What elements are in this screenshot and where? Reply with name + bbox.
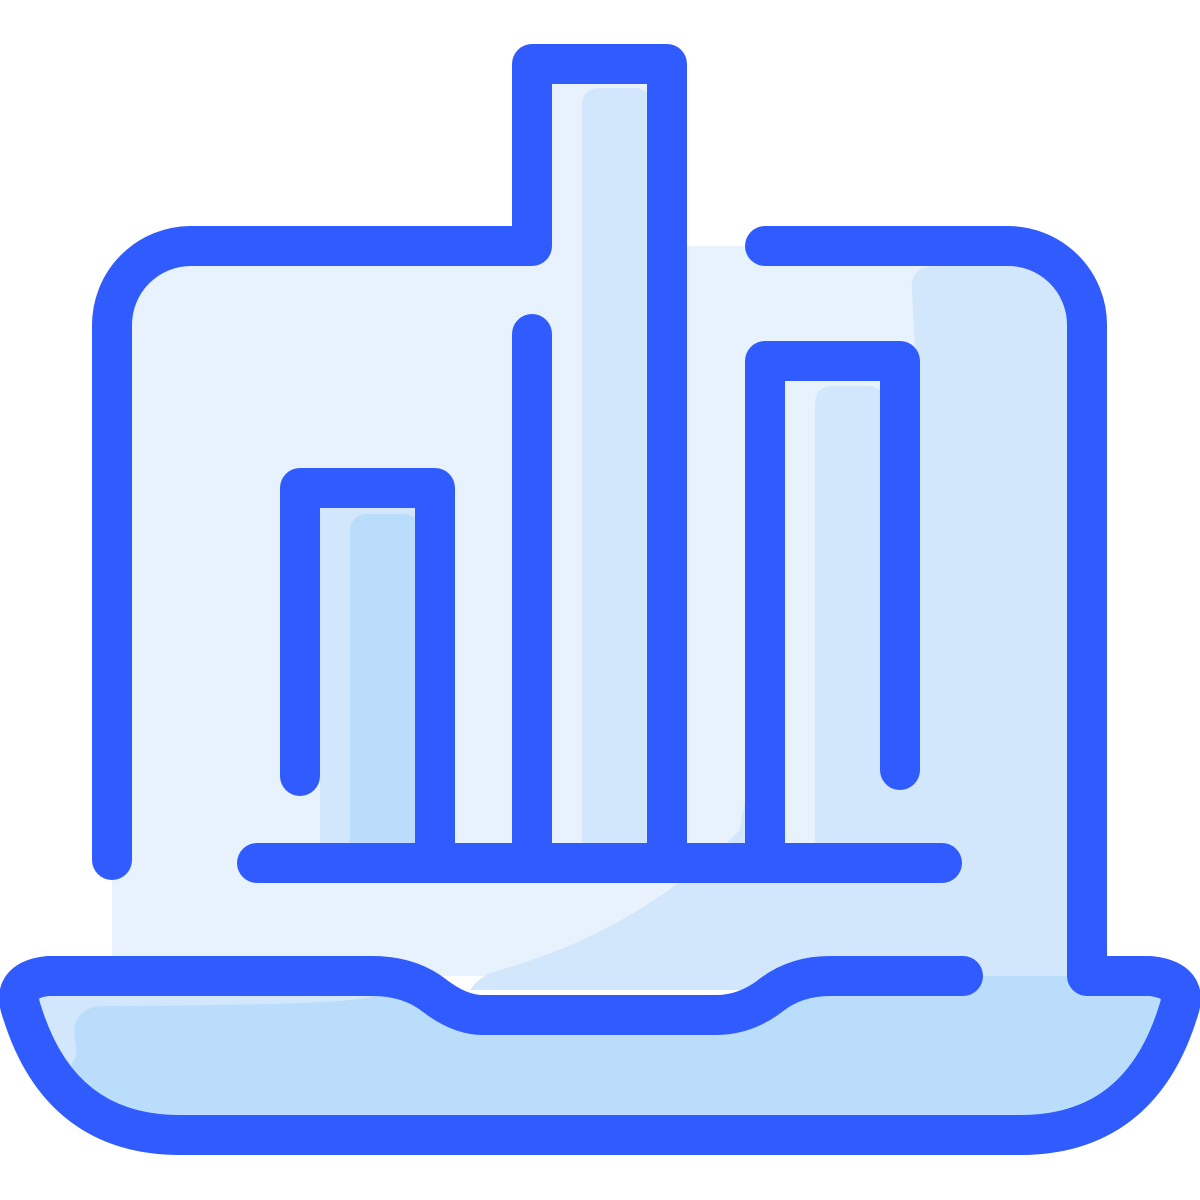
base fill <box>21 976 1179 1135</box>
screen fill <box>112 64 1087 990</box>
screen outline right <box>19 246 1181 1135</box>
left bar <box>300 488 435 862</box>
right bar <box>765 361 900 862</box>
baseline <box>257 843 942 883</box>
screen outline left and tall bar <box>112 64 667 862</box>
inner tall bar line <box>512 334 552 862</box>
